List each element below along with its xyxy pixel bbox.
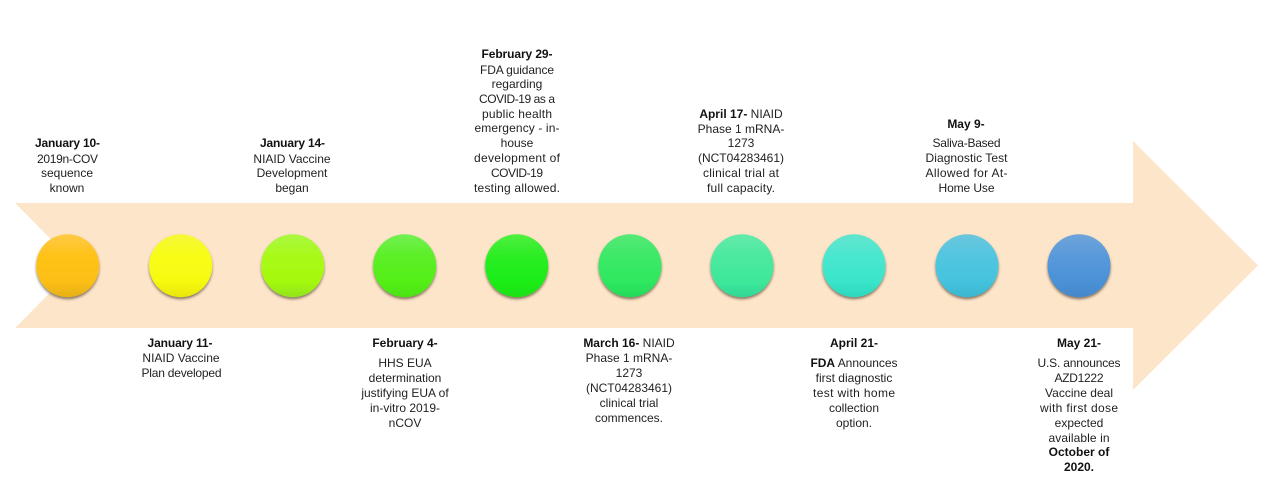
text: March 16 milestone: Phase 1 mRNA-	[586, 351, 672, 365]
text: May 9 milestone: Home Use	[938, 181, 995, 195]
text: February 4 milestone: determination	[369, 371, 441, 385]
text: May 21 milestone: May 21-	[1057, 336, 1101, 350]
text: February 29 milestone: regarding	[492, 77, 542, 91]
text: April 17 milestone: Phase 1 mRNA-	[698, 122, 784, 136]
marker: January 11	[149, 234, 212, 297]
text: April 21 milestone: option.	[836, 416, 872, 430]
text: February 4 milestone: nCOV	[389, 416, 421, 430]
text: May 21 milestone: expected	[1055, 416, 1103, 430]
text: February 4 milestone: February 4-	[372, 336, 438, 350]
text: January 14 milestone: January 14-	[260, 136, 325, 150]
text: April 17 milestone: clinical trial at	[703, 166, 780, 180]
text: March 16 milestone: commences.	[595, 411, 663, 425]
text: May 9 milestone: Diagnostic Test	[926, 151, 1008, 165]
text: February 29 milestone: public health	[482, 107, 552, 121]
text: May 21 milestone: with first dose	[1039, 401, 1118, 415]
text: February 4 milestone: HHS EUA	[378, 356, 432, 370]
text: February 4 milestone: justifying EUA of	[360, 386, 449, 400]
timeline arrow	[15, 141, 1258, 390]
text: May 9 milestone: May 9-	[947, 117, 985, 131]
text: March 16 milestone: March 16- NIAID	[583, 336, 675, 350]
text: May 9 milestone: Allowed for At-	[926, 166, 1008, 180]
marker: April 21	[822, 234, 886, 297]
text: April 17 milestone: 1273	[728, 136, 755, 150]
text: April 21 milestone: first diagnostic	[816, 371, 892, 385]
text: February 29 milestone	[474, 47, 561, 195]
text: April 17 milestone	[698, 107, 784, 195]
text: March 16 milestone: (NCT04283461)	[586, 381, 672, 395]
text: April 21 milestone: April 21-	[830, 336, 878, 350]
text: January 10 milestone	[35, 136, 100, 195]
text: January 14 milestone: began	[275, 181, 309, 195]
text: May 21 milestone: U.S. announces	[1038, 356, 1120, 370]
text: January 10 milestone: 2019n-COV	[37, 152, 98, 166]
text: May 21 milestone: 2020.	[1064, 460, 1094, 474]
text: May 21 milestone: Vaccine deal	[1045, 386, 1113, 400]
text: March 16 milestone: clinical trial	[600, 396, 658, 410]
text: April 21 milestone: test with home	[813, 386, 895, 400]
text: February 29 milestone: house	[501, 136, 534, 150]
marker: May 21	[1048, 234, 1110, 297]
text: January 11 milestone: NIAID Vaccine	[142, 351, 220, 365]
text: February 29 milestone: COVID-19 as a	[479, 92, 555, 106]
text: May 21 milestone: AZD1222	[1054, 371, 1104, 385]
text: February 4 milestone	[360, 336, 449, 430]
text: February 29 milestone: COVID-19	[491, 166, 543, 180]
text: April 17 milestone: April 17- NIAID	[699, 107, 783, 121]
text: May 21 milestone	[1038, 336, 1120, 474]
text: January 11 milestone: January 11-	[148, 336, 212, 350]
marker: May 9	[936, 234, 998, 297]
text: May 9 milestone: Saliva-Based	[932, 136, 1000, 150]
text: February 29 milestone: emergency - in-	[474, 121, 560, 135]
marker: January 14	[261, 234, 324, 297]
text: January 10 milestone: sequence	[41, 166, 93, 180]
text: February 29 milestone: February 29-	[482, 47, 552, 61]
text: January 14 milestone: Development	[257, 166, 328, 180]
text: January 14 milestone: NIAID Vaccine	[253, 152, 331, 166]
text: January 10 milestone: January 10-	[35, 136, 100, 150]
text: February 29 milestone: testing allowed.	[474, 181, 560, 195]
text: January 11 milestone: Plan developed	[142, 366, 222, 380]
text: April 17 milestone: full capacity.	[707, 181, 775, 195]
text: January 10 milestone: known	[50, 181, 84, 195]
text: January 14 milestone	[253, 136, 331, 195]
text: February 29 milestone: FDA guidance	[480, 63, 554, 77]
text: April 21 milestone	[810, 336, 898, 430]
text: February 4 milestone: in-vitro 2019-	[370, 401, 440, 415]
text: May 21 milestone: available in	[1048, 431, 1110, 445]
marker: April 17	[710, 234, 774, 297]
text: May 21 milestone: October of	[1049, 445, 1110, 459]
text: May 9 milestone	[926, 117, 1008, 195]
text: March 16 milestone: 1273	[616, 366, 643, 380]
marker: February 4	[373, 234, 436, 297]
text: April 21 milestone: collection	[829, 401, 879, 415]
text: April 17 milestone: (NCT04283461)	[698, 151, 784, 165]
marker: March 16	[598, 234, 662, 297]
milestone markers	[36, 234, 1111, 297]
text: January 11 milestone	[142, 336, 222, 380]
marker: February 29	[485, 234, 548, 297]
text: April 21 milestone: FDA Announces	[810, 356, 898, 370]
marker: January 10	[36, 234, 99, 297]
text: February 29 milestone: development of	[474, 151, 561, 165]
text: March 16 milestone	[583, 336, 675, 425]
